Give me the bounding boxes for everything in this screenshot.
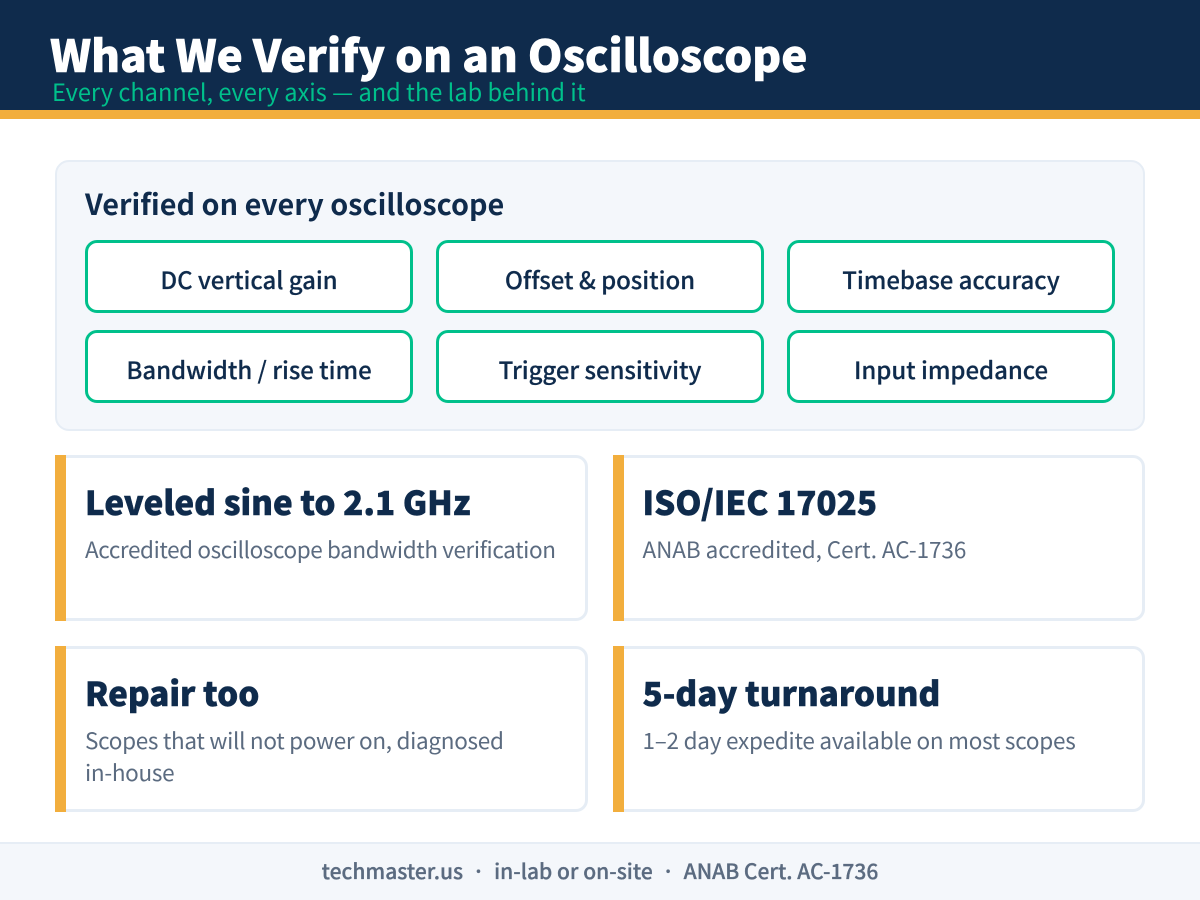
footer: techmaster.us · in-lab or on-site · ANAB Cert. AC-1736 [322,856,878,886]
chip: Timebase accuracy [787,240,1115,313]
header banner [0,0,1200,119]
card: repair too: Scopes that will not power on, diagnosed [85,724,504,756]
card: repair too: Repair too [85,667,259,716]
chip: Input impedance: Input impedance [854,351,1048,386]
panel: verified on every oscilloscope [55,160,1145,431]
footer [0,842,1200,900]
card: ISO/IEC 17025: ISO/IEC 17025 [642,476,877,525]
card: leveled sine: Accredited oscilloscope bandwidth verification [85,533,556,565]
card: leveled sine [55,455,588,621]
card: 5-day turnaround: 5-day turnaround [642,667,940,716]
panel heading: Verified on every oscilloscope [85,183,504,224]
chip: DC vertical gain: DC vertical gain [160,261,338,296]
chip: Bandwidth / rise time: Bandwidth / rise time [126,351,372,386]
chip: Offset & position [436,240,764,313]
card: ISO/IEC 17025: ANAB accredited, Cert. AC-1736 [642,533,966,565]
subtitle: Every channel, every axis — and the lab behind it [52,74,586,108]
card: leveled sine: Leveled sine to 2.1 GHz [85,476,471,525]
chip: DC vertical gain [85,240,413,313]
card: 5-day turnaround [612,646,1145,812]
chip: Timebase accuracy: Timebase accuracy [842,261,1060,296]
card: ISO/IEC 17025 [612,455,1145,621]
chip: Offset & position: Offset & position [505,261,695,296]
chip: Input impedance [787,330,1115,403]
card: repair too [55,646,588,812]
chip: Bandwidth / rise time [85,330,413,403]
chip: Trigger sensitivity: Trigger sensitivity [499,351,701,386]
chip: Trigger sensitivity [436,330,764,403]
title: What We Verify on an Oscilloscope [50,21,807,85]
card: 5-day turnaround: 1–2 day expedite available on most scopes [642,724,1075,756]
card: repair too: in-house [85,756,174,788]
